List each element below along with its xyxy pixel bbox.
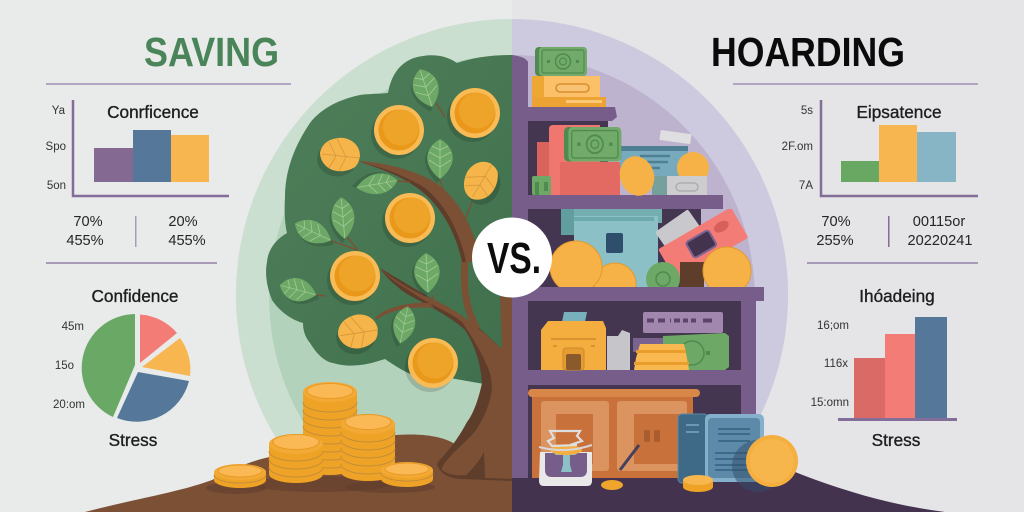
blue book [678, 414, 764, 483]
small stack right [381, 462, 433, 487]
chart heading: Ihóadeing [859, 286, 935, 306]
y axis labels: 5on [47, 180, 66, 192]
title: saving: SAVING [144, 29, 279, 75]
pie labels: 15o [55, 360, 74, 372]
items: third shelf [550, 209, 752, 287]
small stack left [214, 464, 266, 488]
lower branch [375, 303, 434, 320]
y axis labels: 5s [801, 105, 813, 117]
glass jar [539, 431, 592, 486]
coins on tree [327, 88, 500, 392]
bars [854, 317, 947, 418]
y axis labels [46, 105, 66, 192]
bars [841, 125, 956, 182]
upper limb [464, 258, 477, 329]
yellow boxes [532, 76, 606, 107]
stats: hoarding: 20220241 [908, 233, 972, 249]
stats: hoarding: 70% [821, 214, 851, 230]
upper branch [360, 161, 482, 262]
items: top shelf [532, 47, 606, 107]
orange leaves [317, 138, 508, 359]
panel: saving bar chart [46, 100, 229, 196]
panel: saving pie chart [53, 286, 190, 450]
stats: saving [66, 214, 206, 249]
items: bottom shelf [528, 389, 798, 492]
pie labels [53, 321, 85, 411]
tree trunk and branches [317, 103, 512, 481]
baseline [838, 418, 957, 421]
orange cabinet [528, 389, 700, 478]
y axis labels [782, 105, 813, 192]
green leaves [276, 65, 453, 350]
y axis labels: Spo [46, 141, 66, 153]
y axis labels: 15:omn [811, 397, 849, 409]
small coin [601, 480, 623, 490]
background circle: saving [236, 19, 512, 512]
title: hoarding: HOARDING [711, 29, 905, 75]
axes [73, 100, 229, 196]
stats: saving: 455% [66, 233, 104, 249]
bars [94, 130, 209, 182]
pie heading: Confidence [92, 286, 178, 306]
yellow safe [541, 312, 606, 370]
shelving unit [512, 55, 764, 478]
items: fourth shelf [541, 312, 729, 370]
stats: hoarding: 00115or [913, 214, 965, 230]
chart heading: Conrficence [107, 102, 199, 122]
ground: saving [85, 434, 512, 512]
panel: saving illustration [85, 19, 512, 512]
middle stack [341, 414, 395, 481]
axes [821, 100, 978, 196]
small coin stack [683, 475, 713, 492]
banknote stack [535, 47, 587, 76]
twigs [317, 103, 472, 300]
left stack [269, 434, 323, 483]
tree crown [266, 55, 512, 384]
pie chart [82, 314, 190, 422]
pie labels: 45m [62, 321, 84, 333]
coin stacks [206, 382, 435, 494]
vs badge [472, 218, 552, 298]
pie caption: Stress [109, 430, 157, 450]
y axis labels: 2F.om [782, 141, 813, 153]
trunk and main branch [380, 268, 512, 479]
y axis labels: 16;om [817, 320, 849, 332]
y axis labels: Ya [52, 105, 66, 117]
y axis labels [811, 320, 849, 409]
pie labels: 20:om [53, 399, 85, 411]
panel: hoarding bar chart [782, 100, 978, 196]
tree [266, 55, 512, 481]
items: second shelf [532, 125, 709, 200]
stats: saving: 455% [168, 233, 206, 249]
chart caption: Stress [872, 430, 920, 450]
ground: hoarding [512, 470, 945, 512]
vs badge: VS. [487, 234, 541, 283]
chart heading: Eipsatence [856, 102, 942, 122]
tall stack [303, 382, 357, 475]
trunk shadow [380, 268, 512, 481]
y axis labels: 7A [799, 180, 813, 192]
stats: saving: 20% [168, 214, 198, 230]
panel: hoarding illustration [512, 19, 945, 512]
panel: hoarding bar chart two [811, 286, 957, 450]
stats: hoarding: 255% [816, 233, 854, 249]
y axis labels: 116x [824, 358, 848, 370]
background circle: hoarding [512, 19, 788, 512]
stats: hoarding [816, 214, 972, 249]
large coin [732, 435, 798, 492]
stats: saving: 70% [73, 214, 103, 230]
